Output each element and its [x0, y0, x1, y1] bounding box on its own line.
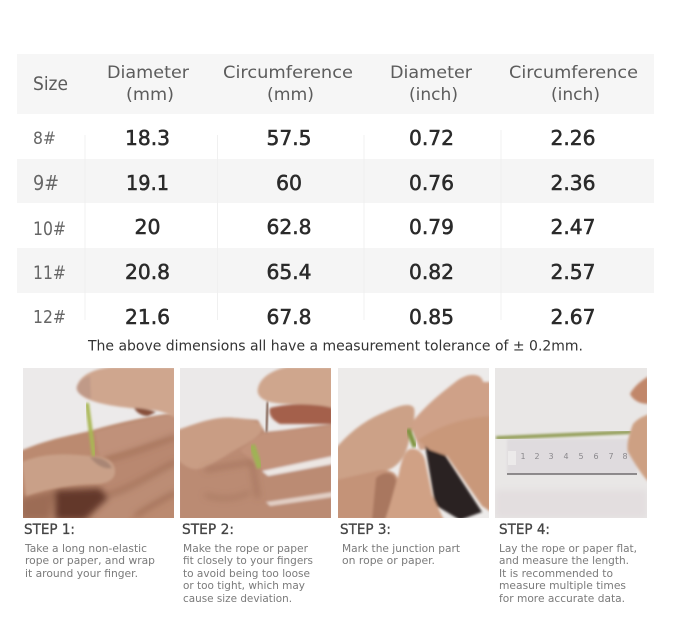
step 1 text: Take a long non-elastic — [24, 543, 147, 555]
ruler: 2 — [534, 452, 540, 461]
ruler: 5 — [578, 452, 584, 461]
table header row: (mm) — [126, 85, 174, 105]
row 10#: 0.79 — [409, 215, 454, 239]
tolerance note: The above dimensions all have a measurement tolerance of ± 0.2mm. — [87, 338, 583, 354]
row 11#: 2.57 — [550, 260, 596, 284]
step 1 text: rope or paper, and wrap — [25, 555, 155, 567]
row 9#: 2.36 — [550, 171, 596, 195]
row 8#: 57.5 — [266, 126, 312, 150]
ruler: 1 — [520, 452, 526, 461]
pen mark on rope — [408, 429, 415, 447]
step 2 text — [182, 522, 313, 605]
ruler: 3 — [548, 452, 554, 461]
row 9#: 9# — [33, 171, 59, 195]
ring of rope on finger — [252, 445, 260, 468]
step 4 text: for more accurate data. — [499, 593, 625, 605]
step 4 text: It is recommended to — [499, 568, 613, 580]
table header row: (inch) — [551, 85, 600, 105]
row 8#: 2.26 — [550, 126, 596, 150]
row 10#: 62.8 — [266, 215, 312, 239]
table header row: Diameter — [107, 63, 189, 83]
row 11#: 11# — [33, 263, 66, 284]
table header row: Circumference — [509, 63, 638, 83]
row 10#: 10# — [33, 219, 66, 240]
step 3 text: Mark the junction part — [342, 543, 460, 555]
step 2 text: to avoid being too loose — [183, 568, 310, 580]
step 1 text: it around your finger. — [25, 568, 138, 580]
row 9# — [33, 171, 596, 195]
row 8#: 8# — [33, 129, 56, 149]
row 12#: 2.67 — [550, 305, 596, 329]
row 12#: 12# — [33, 307, 66, 328]
row 9#: 19.1 — [126, 171, 169, 195]
row 10# — [33, 215, 596, 240]
row 12#: 21.6 — [125, 305, 170, 329]
table header row: Circumference — [223, 63, 353, 83]
rope — [87, 403, 94, 456]
table header row — [33, 63, 638, 105]
ruler: 8 — [622, 452, 628, 461]
table header row: (mm) — [267, 85, 314, 105]
step 4 text: and measure the length. — [499, 555, 629, 567]
row 11#: 0.82 — [409, 260, 454, 284]
step 2 text: cause size deviation. — [183, 593, 292, 605]
step 3 text: STEP 3: — [340, 522, 391, 538]
photo: step 1, wrapping rope around finger — [18, 367, 178, 522]
step 1 text — [24, 522, 155, 580]
step 2 text: STEP 2: — [182, 522, 234, 538]
step 2 text: Make the rope or paper — [183, 543, 309, 555]
step 4 text — [499, 522, 637, 605]
row 12# — [33, 305, 596, 329]
ruler: 4 — [563, 452, 569, 461]
row 8#: 0.72 — [409, 126, 454, 150]
photo: step 4, measuring with ruler — [495, 368, 649, 518]
measured rope — [496, 432, 632, 438]
row 10#: 2.47 — [550, 215, 596, 239]
photo: step 3, marking the junction — [336, 368, 491, 520]
row 9#: 60 — [276, 171, 302, 195]
step 2 text: fit closely to your fingers — [183, 555, 313, 567]
fingers holding rope — [627, 376, 649, 482]
ruler — [507, 439, 637, 474]
step 4 text: measure multiple times — [499, 580, 626, 592]
rope — [266, 402, 268, 432]
table header row: (inch) — [409, 85, 458, 105]
table header row: Diameter — [390, 63, 472, 83]
step 1 text: STEP 1: — [24, 522, 75, 538]
row 12#: 67.8 — [266, 305, 312, 329]
ruler: 6 — [593, 452, 599, 461]
row 8#: 18.3 — [125, 126, 170, 150]
size table — [17, 54, 654, 329]
row 10#: 20 — [134, 215, 160, 239]
table header row: Size — [33, 73, 68, 95]
step 2 text: or too tight, which may — [183, 580, 305, 592]
row 11#: 65.4 — [266, 260, 312, 284]
step 3 text — [340, 522, 460, 567]
row 11#: 20.8 — [125, 260, 170, 284]
step 4 text: STEP 4: — [499, 522, 550, 538]
ruler: 7 — [608, 452, 614, 461]
step 4 text: Lay the rope or paper flat, — [499, 543, 637, 555]
row 8# — [33, 126, 596, 150]
photo: step 2, fitting rope closely — [178, 367, 333, 522]
step 3 text: on rope or paper. — [342, 555, 435, 567]
row 12#: 0.85 — [409, 305, 454, 329]
row 11# — [33, 260, 596, 284]
row 9#: 0.76 — [409, 171, 454, 195]
